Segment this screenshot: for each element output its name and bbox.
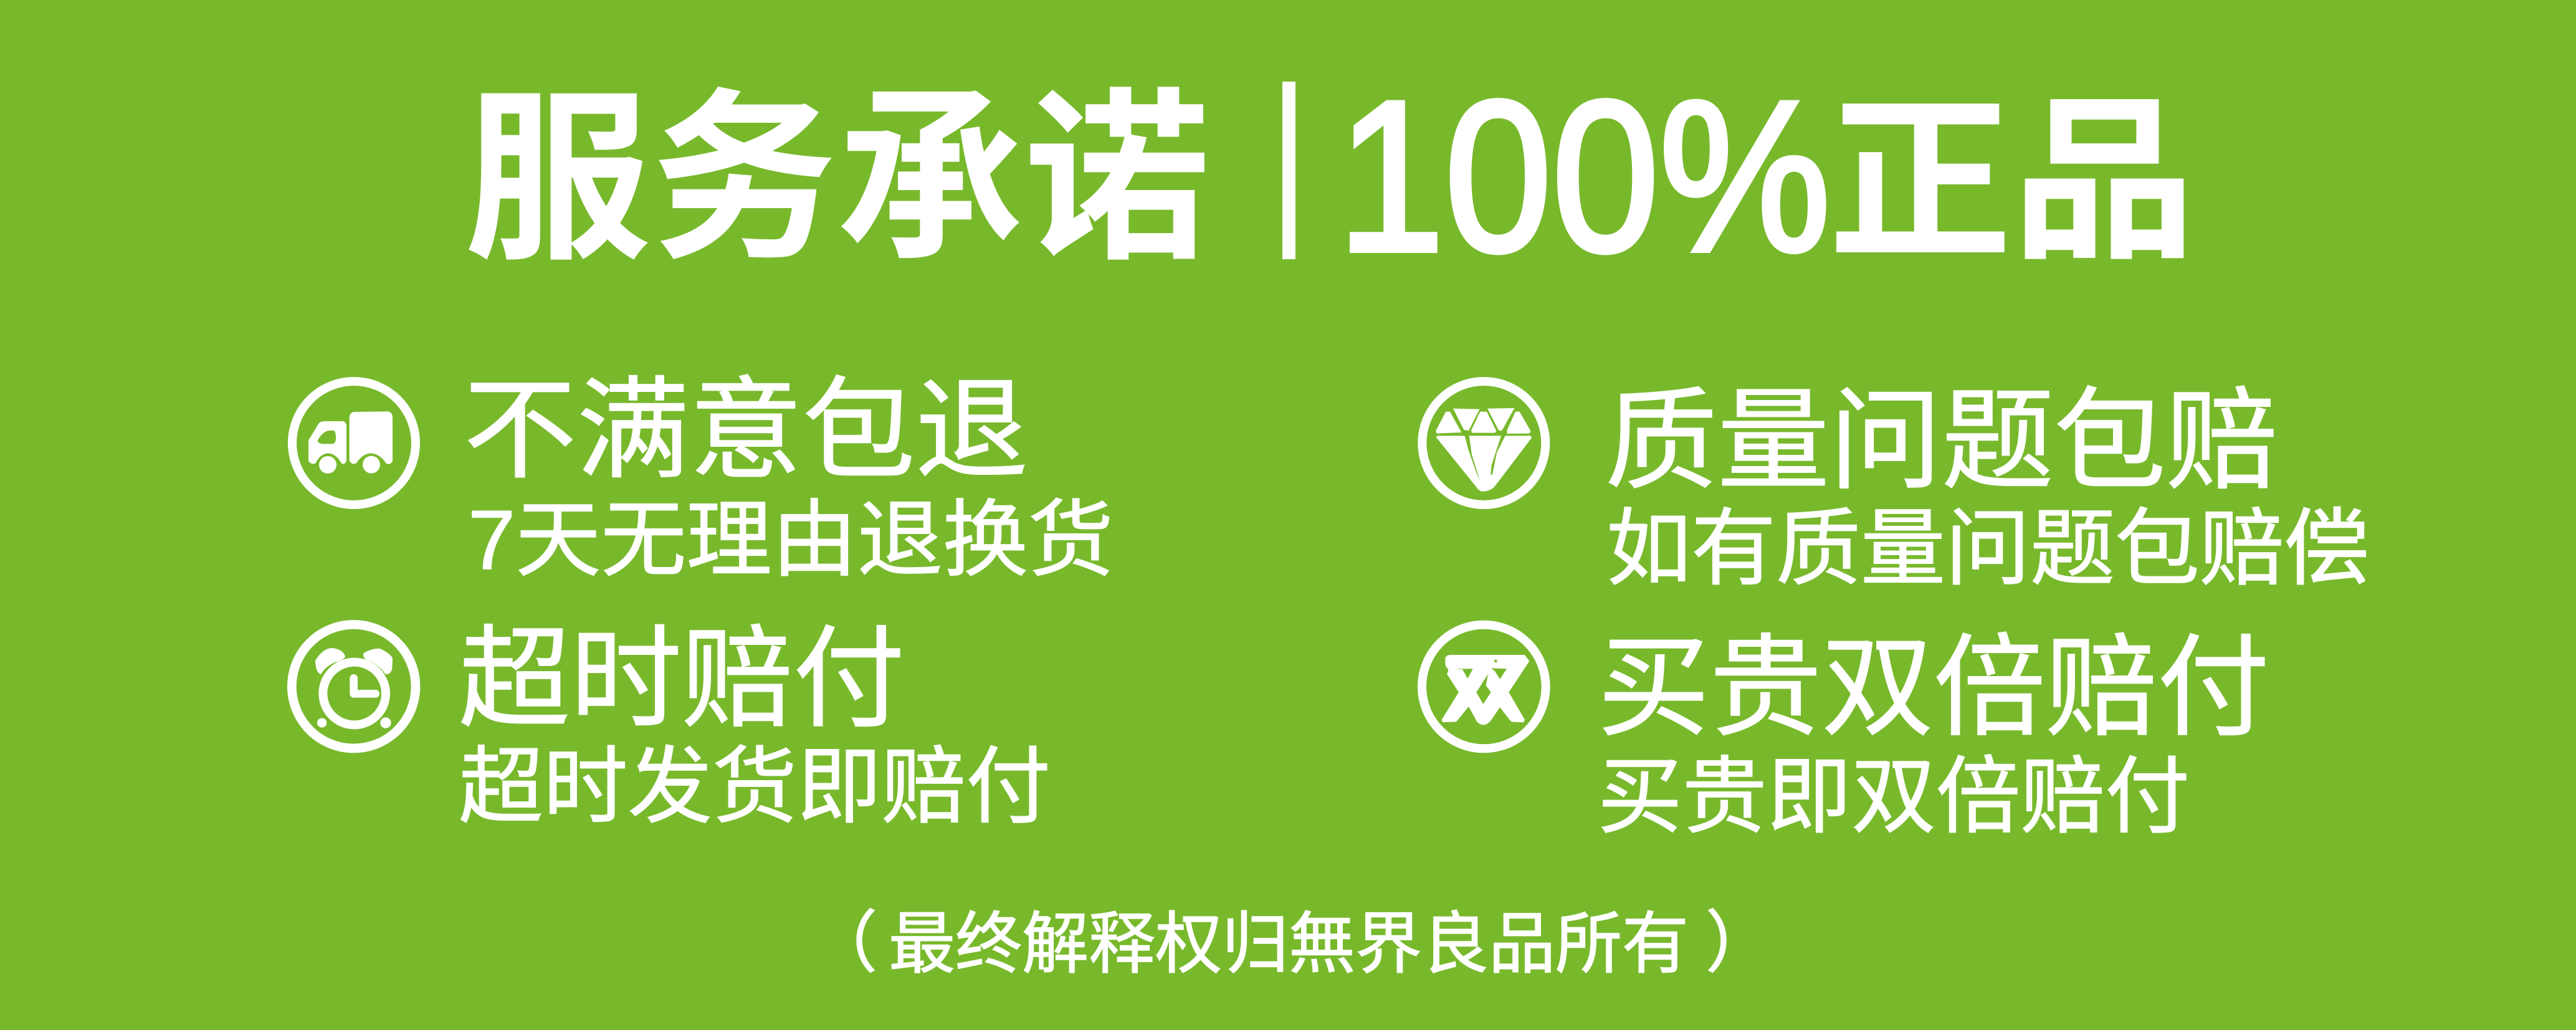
item: quality guarantee (1422, 379, 2369, 596)
footnote close paren: ） (1705, 905, 1773, 980)
heading: 100%: 100% (1337, 57, 1831, 297)
icon: alarm clock (292, 624, 416, 748)
title (464, 57, 2196, 297)
icon: double character badge (1422, 625, 1546, 748)
footnote (810, 905, 1773, 981)
text: double refund if overpriced: 买贵即双倍赔付 (1598, 750, 2190, 844)
heading: quality compensation: 质量问题包赔 (1605, 379, 2278, 503)
heading: genuine: 正品 (1828, 83, 2196, 281)
footnote text: 最终解释权归無界良品所有 (889, 906, 1689, 981)
heading: no-questions return: 不满意包退 (464, 368, 1028, 492)
item: price guarantee (1422, 625, 2269, 844)
footnote open paren: （ (810, 905, 877, 980)
title divider (1282, 82, 1295, 259)
text: quality issue compensated: 如有质量问题包赔偿 (1606, 502, 2369, 596)
text: seven day return: 7天无理由退换货 (468, 493, 1114, 587)
heading: overtime compensation: 超时赔付 (459, 617, 905, 741)
icon: truck (292, 381, 416, 505)
icon: diamond (1422, 381, 1545, 505)
heading: double compensation: 买贵双倍赔付 (1598, 626, 2269, 750)
heading: service promise: 服务承诺 (464, 77, 1210, 282)
item: return guarantee (292, 368, 1114, 587)
text: late shipment compensated: 超时发货即赔付 (459, 740, 1051, 834)
item: late delivery compensation (292, 617, 1051, 834)
